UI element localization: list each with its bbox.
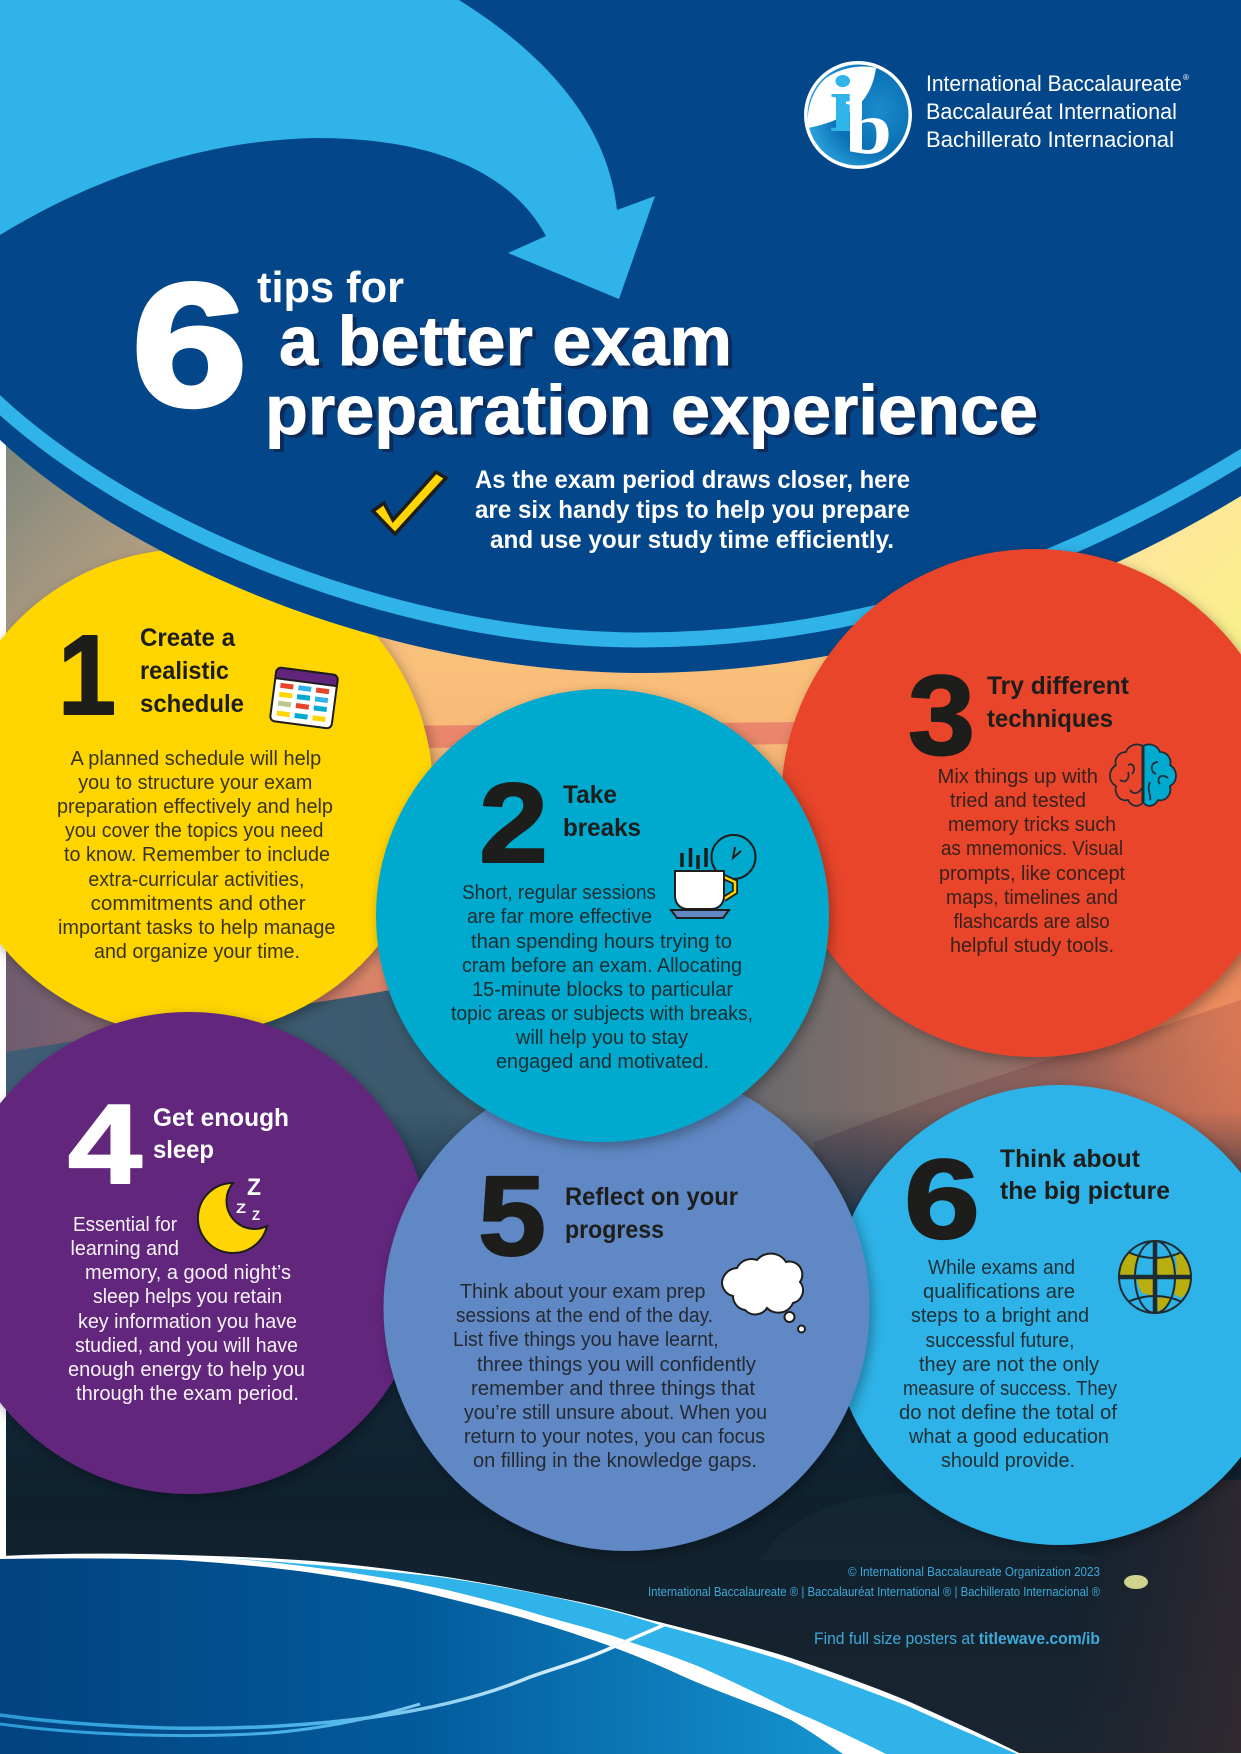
tip 2 body text: than spending hours trying to	[471, 930, 732, 953]
tip 1 body text: extra-curricular activities,	[88, 868, 304, 891]
tip 5 body text	[453, 1280, 767, 1472]
intro text: are six handy tips to help you prepare	[475, 496, 910, 524]
icon: thought cloud	[722, 1254, 805, 1332]
intro text: and use your study time efficiently.	[490, 526, 894, 554]
panel: tip 6 think about the big picture: 6	[904, 1136, 980, 1262]
tip 6 body text: should provide.	[941, 1449, 1075, 1472]
tip 6 body text: they are not the only	[919, 1353, 1100, 1376]
icon: moon and zzz: Z	[236, 1200, 247, 1216]
logo emblem	[804, 61, 912, 170]
big curved arrow	[0, 0, 655, 299]
tip 4 heading: Get enough	[153, 1104, 289, 1132]
tip 5 body text: return to your notes, you can focus	[464, 1425, 765, 1448]
panel: tip 2 take breaks	[376, 689, 829, 1142]
tip 2 heading: Take	[563, 781, 617, 809]
footer credits: Find full size posters at titlewave.com/ib	[814, 1629, 1100, 1648]
icon: coffee cup and clock	[671, 835, 756, 918]
tip 6 body text: steps to a bright and	[911, 1304, 1089, 1327]
tip 5 body text: Think about your exam prep	[460, 1280, 706, 1303]
icon: moon and zzz: Z	[247, 1174, 261, 1201]
tip 3 body text: as mnemonics. Visual	[941, 837, 1123, 860]
tip 4 body text: learning and	[70, 1237, 179, 1260]
panel: tip 2 take breaks: 2	[479, 760, 548, 886]
icon: moon and zzz: Z	[252, 1207, 260, 1223]
tip 6 body text	[899, 1256, 1118, 1472]
icon: globe	[1119, 1241, 1191, 1313]
panel: tip 5 reflect on your progress: 5	[478, 1153, 546, 1279]
tip 2 body text: topic areas or subjects with breaks,	[451, 1002, 753, 1025]
tip 3 heading: Try different	[987, 672, 1130, 700]
tip 4 heading: sleep	[153, 1136, 214, 1164]
header navy panel	[0, 0, 1241, 673]
tip 3 body text: Mix things up with	[938, 765, 1098, 788]
title: 6	[132, 247, 247, 442]
tip 2 heading	[563, 781, 641, 842]
tip 3 body text: tried and tested	[950, 789, 1086, 812]
tip 2 heading: breaks	[563, 814, 641, 842]
logo emblem: b	[845, 88, 892, 170]
tip 1 heading	[140, 624, 244, 718]
tip 4 body text: key information you have	[78, 1310, 297, 1333]
tip 1 body text: you to structure your exam	[78, 771, 312, 794]
tip 5 heading: progress	[565, 1216, 664, 1244]
tip 2 body text: will help you to stay	[515, 1026, 689, 1049]
footer credits: © International Baccalaureate Organization 2023	[848, 1564, 1100, 1579]
tip 3 body text: memory tricks such	[948, 813, 1116, 836]
tip 2 body text: cram before an exam. Allocating	[462, 954, 742, 977]
title	[132, 247, 1038, 449]
tip 5 heading	[565, 1183, 738, 1244]
tip 1 body text: important tasks to help manage	[58, 916, 336, 939]
title: a better exam	[279, 302, 732, 380]
tip 3 heading: techniques	[987, 705, 1113, 733]
tip 3 body text: prompts, like concept	[939, 862, 1125, 885]
tip 2 body text: are far more effective	[467, 905, 652, 928]
icon: yellow check mark	[373, 472, 446, 534]
panel: tip 6 think about the big picture	[830, 1085, 1241, 1545]
panel: tip 4 get enough sleep: 4	[68, 1081, 142, 1207]
tip 1 body text: A planned schedule will help	[70, 747, 321, 770]
tip 3 body text: maps, timelines and	[946, 886, 1118, 909]
tip 4 body text: studied, and you will have	[75, 1334, 298, 1357]
tip 6 heading: Think about	[1000, 1145, 1141, 1173]
title: preparation experience	[265, 371, 1038, 449]
tip 4 body text: memory, a good night’s	[85, 1261, 291, 1284]
tip 3 body text: flashcards are also	[954, 910, 1110, 933]
tip 4 body text: Essential for	[73, 1213, 177, 1236]
intro text: As the exam period draws closer, here	[475, 466, 910, 494]
tip 1 body text: you cover the topics you need	[65, 819, 324, 842]
icon: calendar	[270, 667, 338, 729]
tip 6 body text: While exams and	[928, 1256, 1075, 1279]
intro text	[475, 466, 910, 554]
tip 4 body text: enough energy to help you	[68, 1358, 305, 1381]
tip 6 heading: the big picture	[1000, 1177, 1170, 1205]
panel: tip 1 create a realistic schedule	[0, 549, 433, 1035]
tip 2 body text	[451, 881, 753, 1073]
icon: moon and zzz	[198, 1174, 267, 1253]
tip 4 body text	[68, 1213, 305, 1405]
panel: tip 3 try different techniques: 3	[908, 652, 975, 778]
logo wordmark: International Baccalaureate	[926, 71, 1182, 96]
blue curved stripe	[0, 396, 1241, 640]
tip 6 body text: qualifications are	[923, 1280, 1075, 1303]
tip 1 heading: schedule	[140, 690, 244, 718]
tip 5 body text: you’re still unsure about. When you	[464, 1401, 767, 1424]
tip 5 body text: three things you will confidently	[477, 1353, 757, 1376]
tip 1 body text: preparation effectively and help	[57, 795, 333, 818]
tip 6 body text: what a good education	[908, 1425, 1109, 1448]
logo wordmark	[926, 71, 1189, 152]
tip 2 body text: Short, regular sessions	[462, 881, 656, 904]
tip 3 body text	[938, 765, 1125, 957]
tip 3 body text: helpful study tools.	[950, 934, 1114, 957]
footer credits: International Baccalaureate ® | Baccalauréat International ® | Bachillerato Internacional ®	[648, 1584, 1100, 1599]
panel: tip 1 create a realistic schedule: 1	[58, 612, 116, 738]
tip 1 body text: commitments and other	[91, 892, 306, 915]
icon: brain	[1110, 744, 1176, 806]
tip 2 body text: engaged and motivated.	[496, 1050, 709, 1073]
tip 4 body text: through the exam period.	[76, 1382, 299, 1405]
tip 1 body text	[57, 747, 336, 963]
tip 6 heading	[1000, 1145, 1170, 1205]
logo emblem: i	[829, 61, 856, 149]
tip 5 heading: Reflect on your	[565, 1183, 738, 1211]
tip 6 body text: measure of success. They	[903, 1377, 1118, 1400]
tip 2 body text: 15-minute blocks to particular	[472, 978, 733, 1001]
tip 6 body text: successful future,	[926, 1329, 1074, 1352]
logo wordmark: Baccalauréat International	[926, 99, 1177, 124]
footer swoosh	[0, 1554, 1021, 1754]
tip 1 body text: to know. Remember to include	[64, 843, 330, 866]
panel: tip 3 try different techniques	[781, 549, 1241, 1057]
tip 5 body text: remember and three things that	[471, 1377, 755, 1400]
tip 5 body text: sessions at the end of the day.	[456, 1304, 713, 1327]
tip 1 heading: realistic	[140, 657, 229, 685]
title: tips for	[257, 263, 404, 312]
tip 5 body text: List five things you have learnt,	[453, 1328, 719, 1351]
tip 4 heading	[153, 1104, 289, 1164]
tip 1 heading: Create a	[140, 624, 236, 652]
logo wordmark: ®	[1183, 73, 1189, 82]
logo wordmark: Bachillerato Internacional	[926, 127, 1174, 152]
IB logo	[804, 61, 1189, 170]
panel: tip 4 get enough sleep	[0, 1012, 430, 1494]
tip 1 body text: and organize your time.	[94, 940, 300, 963]
footer credits	[648, 1564, 1100, 1648]
tip 4 body text: sleep helps you retain	[93, 1285, 282, 1308]
tip 3 heading	[987, 672, 1130, 733]
tip 6 body text: do not define the total of	[899, 1401, 1117, 1424]
tip 5 body text: on filling in the knowledge gaps.	[473, 1449, 757, 1472]
panel: tip 5 reflect on your progress	[384, 1065, 870, 1551]
